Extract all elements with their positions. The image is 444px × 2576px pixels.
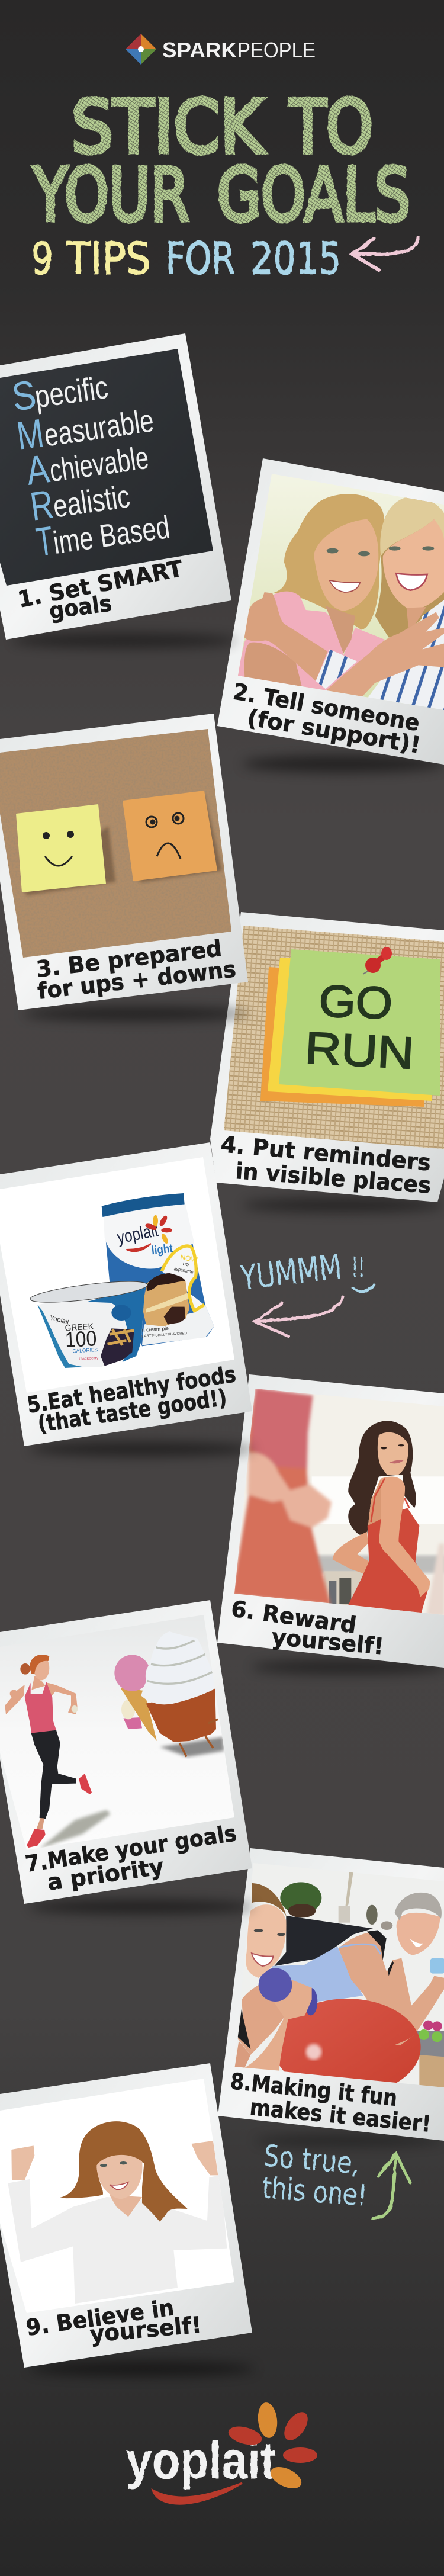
caption: 6. Reward bbox=[230, 1595, 358, 1639]
caption: for ups + downs bbox=[36, 956, 237, 1004]
SMART acronym list: R bbox=[28, 481, 56, 529]
caption bbox=[220, 1131, 432, 1199]
title: YOUR bbox=[33, 153, 189, 238]
SMART acronym list: easurable bbox=[42, 403, 156, 453]
panel: tip 4 put reminders bbox=[210, 912, 444, 1212]
title: TO bbox=[289, 85, 373, 170]
caption bbox=[25, 1361, 237, 1437]
greek yogurt cup: 100 bbox=[65, 1326, 97, 1352]
subtitle bbox=[31, 233, 342, 284]
yoplait light cup: light bbox=[151, 1242, 173, 1257]
caption: 1. Set SMART bbox=[15, 555, 185, 613]
caption: (that taste good!) bbox=[36, 1384, 229, 1437]
clothes rack bbox=[324, 1571, 365, 1605]
caption: 2. Tell someone bbox=[231, 679, 422, 736]
panel: tip 9 believe in yourself bbox=[0, 2063, 255, 2376]
panel: tip 6 reward yourself bbox=[217, 1374, 444, 1674]
arrow: green up arrow bbox=[372, 2154, 410, 2218]
title: STICK bbox=[71, 85, 265, 170]
panel: tip 7 make your goals a priority bbox=[0, 1600, 255, 1914]
yoplait light cup: n cream pie bbox=[141, 1325, 169, 1333]
chalk note: so true: So true, bbox=[262, 2138, 361, 2181]
caption: in visible places bbox=[234, 1158, 432, 1199]
white shirt bbox=[8, 2175, 227, 2304]
arrow: pink title arrow bbox=[352, 237, 418, 270]
panel: tip 1 set smart goals bbox=[0, 333, 237, 648]
SMART acronym list: pecific bbox=[33, 370, 110, 415]
logo: SparkPeople: PEOPLE bbox=[237, 38, 316, 62]
photo: woman in red dress at mirror bbox=[231, 1386, 444, 1623]
woman on ball bbox=[272, 1893, 444, 2045]
SMART acronym list: A bbox=[24, 446, 52, 494]
greek yogurt cup: GREEK bbox=[65, 1322, 94, 1334]
hugging arms bbox=[244, 592, 444, 698]
photo: two women exercising bbox=[231, 1859, 444, 2096]
chalk note: YUMMM: !! bbox=[352, 1251, 365, 1283]
caption: a priority bbox=[46, 1853, 166, 1896]
photo: two women hugging bbox=[231, 468, 444, 717]
exercise ball bbox=[274, 1999, 421, 2095]
logo: Yoplait: yoplait bbox=[126, 2431, 276, 2490]
note: GO RUN: GO bbox=[318, 976, 393, 1029]
panel: tip 3 be prepared bbox=[0, 714, 249, 1021]
photo: runner and dessert bbox=[0, 1611, 237, 1854]
note: GO RUN bbox=[279, 949, 440, 1096]
photo: woman flexing bbox=[0, 2073, 237, 2315]
SMART acronym list: T bbox=[34, 518, 56, 565]
photo: Yoplait products bbox=[0, 1155, 237, 1398]
yoplait light cup: no bbox=[182, 1261, 189, 1267]
yoplait light cup: L ARTIFICIALLY FLAVORED bbox=[141, 1332, 188, 1338]
chalk note: YUMMM: YUMMM bbox=[238, 1246, 343, 1298]
chalk note: so true bbox=[261, 2138, 368, 2213]
SMART acronym list bbox=[9, 362, 172, 565]
blurred dress in foreground bbox=[232, 1387, 332, 1605]
room background bbox=[274, 1872, 444, 2089]
photo: SMART blackboard bbox=[0, 343, 219, 592]
caption: 8.Making it fun bbox=[229, 2068, 398, 2111]
greek yogurt cup: CALORIES bbox=[72, 1347, 98, 1354]
yoplait light cup: NOW bbox=[179, 1253, 198, 1264]
SMART acronym list: M bbox=[14, 410, 47, 459]
note: frowny bbox=[123, 791, 217, 881]
caption: 7.Make your goals bbox=[24, 1820, 238, 1877]
fists bbox=[11, 2141, 218, 2180]
caption bbox=[230, 1595, 385, 1660]
note: GO RUN: RUN bbox=[304, 1023, 415, 1079]
photo: sticky notes on cork bbox=[0, 725, 237, 962]
dessert characters bbox=[114, 1631, 218, 1757]
subtitle: 2015 bbox=[250, 233, 342, 284]
yoplait light cup: yoplait bbox=[115, 1220, 160, 1248]
SMART acronym list: ime Based bbox=[51, 509, 172, 561]
logo: Yoplait bbox=[126, 2401, 317, 2504]
SMART acronym list: S bbox=[9, 372, 39, 420]
logo: SparkPeople: SPARK bbox=[162, 38, 237, 62]
panel: tip 2 tell someone bbox=[217, 458, 444, 772]
arrow: pink yummm arrow bbox=[255, 1297, 343, 1337]
greek yogurt cup bbox=[29, 1277, 149, 1368]
subtitle: 9 bbox=[31, 233, 53, 284]
icon: red push pin bbox=[363, 947, 392, 974]
yoplait light cup: aspartame bbox=[173, 1265, 194, 1275]
caption bbox=[24, 1820, 238, 1896]
logo: SparkPeople bbox=[126, 34, 316, 65]
head and hair bbox=[58, 2121, 188, 2222]
caption: 3. Be prepared bbox=[35, 935, 223, 982]
caption: 9. Believe in bbox=[24, 2294, 176, 2341]
runner bbox=[5, 1655, 92, 1848]
woman bbox=[333, 1421, 430, 1613]
SMART acronym list: ealistic bbox=[51, 478, 132, 525]
note: smiley bbox=[16, 804, 106, 892]
woman in pink blouse bbox=[237, 494, 385, 695]
caption: yourself! bbox=[271, 1624, 385, 1660]
panel: tip 5 eat healthy foods bbox=[0, 1142, 255, 1456]
smiling woman with dumbbell bbox=[235, 1883, 317, 2071]
caption: yourself! bbox=[89, 2312, 202, 2347]
SMART acronym list: chievable bbox=[47, 440, 151, 489]
caption bbox=[229, 2068, 432, 2137]
caption bbox=[35, 935, 237, 1004]
photo: sticky notes on burlap bbox=[219, 921, 444, 1152]
greek yogurt cup: Yoplait bbox=[49, 1315, 70, 1326]
caption: 5.Eat healthy foods bbox=[25, 1361, 237, 1418]
woman in striped shirt bbox=[367, 496, 444, 712]
title bbox=[33, 85, 410, 238]
yoplait light cup bbox=[102, 1193, 214, 1346]
greek yogurt cup: blackberry bbox=[79, 1356, 99, 1361]
caption: goals bbox=[47, 590, 113, 624]
subtitle: FOR bbox=[166, 233, 235, 284]
caption: (for support)! bbox=[246, 704, 423, 759]
panel: tip 8 making it fun bbox=[218, 1848, 444, 2147]
subtitle: TIPS bbox=[66, 233, 151, 284]
caption: 4. Put reminders bbox=[220, 1131, 432, 1176]
chalk note: so true: this one! bbox=[261, 2170, 368, 2213]
